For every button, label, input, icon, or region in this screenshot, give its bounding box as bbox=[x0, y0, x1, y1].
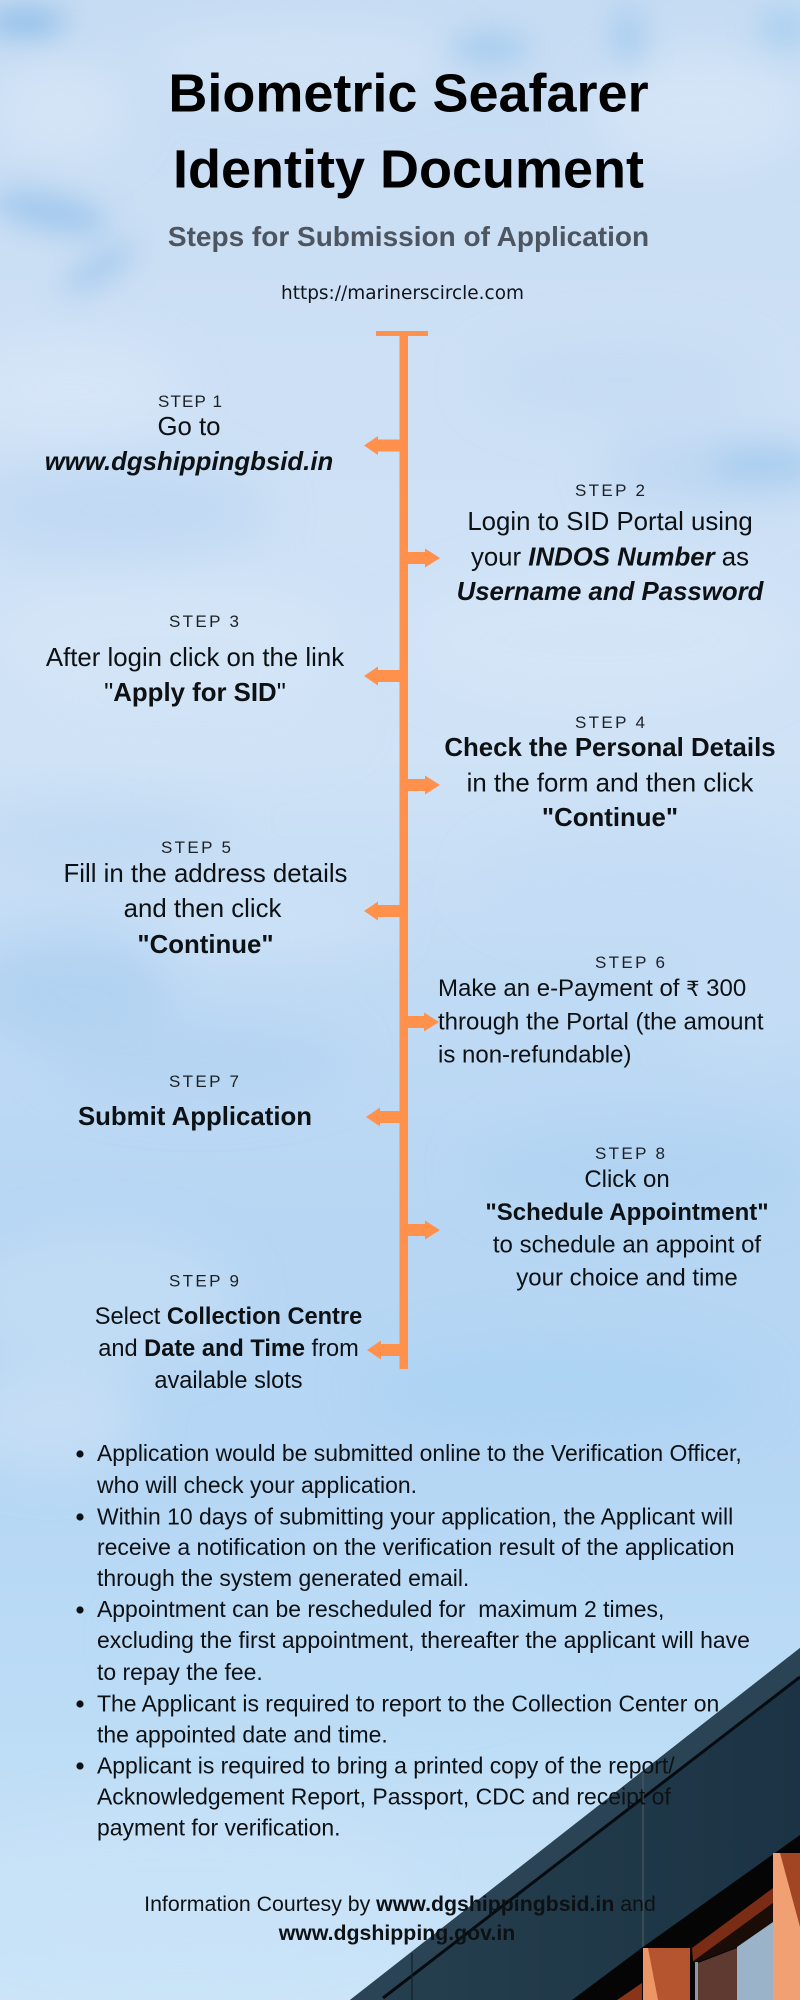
step 8: STEP 8 bbox=[595, 1144, 665, 1163]
step 5: "Continue" bbox=[137, 931, 274, 959]
step 4: STEP 4 bbox=[575, 713, 645, 732]
subtitle: Steps for Submission of Application bbox=[168, 221, 649, 252]
step 9: available slots bbox=[154, 1368, 303, 1394]
step 6: is non-refundable) bbox=[438, 1042, 631, 1068]
notes: bullet list: receive a notification on the verification result of the application bbox=[97, 1534, 735, 1560]
website url: https://marinerscircle.com bbox=[281, 282, 524, 304]
step 1: Go to bbox=[157, 413, 221, 441]
step 2: Username and Password bbox=[457, 578, 765, 606]
step 6: through the Portal (the amount bbox=[438, 1008, 764, 1036]
notes: bullet list: who will check your application. bbox=[96, 1472, 417, 1498]
step 7: STEP 7 bbox=[169, 1072, 239, 1091]
step 5: STEP 5 bbox=[161, 838, 231, 857]
step 4: in the form and then click bbox=[467, 770, 753, 798]
step 7 bbox=[78, 1072, 312, 1131]
notes: bullet list: Within 10 days of submitting your application, the Applicant will bbox=[97, 1504, 733, 1530]
step 8: "Schedule Appointment" bbox=[485, 1199, 769, 1226]
notes: bullet list: to repay the fee. bbox=[97, 1659, 263, 1685]
step 4: Check the Personal Details bbox=[444, 734, 776, 762]
step 4 bbox=[444, 713, 776, 832]
notes: bullet list: payment for verification. bbox=[97, 1814, 340, 1840]
building: roof corner bbox=[350, 1648, 800, 2000]
notes: bullet list bbox=[76, 1440, 750, 1840]
footer: information courtesy: Information Courtesy by www.dgshippingbsid.in and bbox=[144, 1892, 656, 1916]
notes: bullet list: Appointment can be rescheduled for maximum 2 times, bbox=[97, 1596, 664, 1622]
step 8: to schedule an appoint of bbox=[493, 1232, 761, 1258]
title bbox=[168, 64, 649, 200]
step 5 bbox=[64, 838, 347, 959]
step 1: STEP 1 bbox=[158, 392, 222, 411]
step 8 bbox=[485, 1144, 769, 1292]
step 2: Login to SID Portal using bbox=[467, 508, 753, 536]
notes: bullet list: the appointed date and time. bbox=[97, 1722, 388, 1748]
step 7: Submit Application bbox=[78, 1103, 312, 1131]
step 2: STEP 2 bbox=[575, 481, 645, 500]
step 6 bbox=[438, 953, 764, 1068]
step 3: After login click on the link bbox=[46, 644, 344, 672]
title: Identity Document bbox=[173, 140, 644, 200]
timeline: vertical line with arrows bbox=[364, 331, 440, 1369]
footer: information courtesy bbox=[144, 1892, 656, 1945]
step 1 bbox=[45, 392, 333, 476]
step 2 bbox=[457, 481, 765, 606]
step 1: www.dgshippingbsid.in bbox=[45, 448, 333, 476]
notes: bullet list: through the system generated email. bbox=[97, 1565, 469, 1591]
step 3 bbox=[46, 612, 344, 707]
step 4: "Continue" bbox=[542, 804, 678, 832]
step 9 bbox=[95, 1272, 362, 1394]
step 9: and Date and Time from bbox=[98, 1336, 359, 1362]
step 5: Fill in the address details bbox=[64, 860, 347, 888]
notes: bullet list: Application would be submitted online to the Verification Officer, bbox=[97, 1440, 742, 1466]
step 8: your choice and time bbox=[516, 1264, 738, 1292]
step 6: Make an e-Payment of ₹ 300 bbox=[438, 975, 746, 1002]
step 6: STEP 6 bbox=[595, 953, 665, 972]
title: Biometric Seafarer bbox=[168, 64, 649, 124]
step 9: STEP 9 bbox=[169, 1272, 239, 1290]
step 3: "Apply for SID" bbox=[104, 679, 286, 707]
footer: information courtesy: www.dgshipping.gov.in bbox=[278, 1921, 515, 1945]
notes: bullet list: The Applicant is required to report to the Collection Center on bbox=[97, 1690, 719, 1716]
step 5: and then click bbox=[124, 895, 281, 923]
step 3: STEP 3 bbox=[169, 612, 239, 631]
notes: bullet list: Acknowledgement Report, Passport, CDC and receipt of bbox=[97, 1784, 671, 1810]
step 9: Select Collection Centre bbox=[95, 1304, 362, 1330]
step 8: Click on bbox=[584, 1166, 670, 1193]
notes: bullet list: Applicant is required to bring a printed copy of the report/ bbox=[97, 1752, 675, 1778]
notes: bullet list: excluding the first appointment, thereafter the applicant will have bbox=[97, 1627, 750, 1653]
step 2: your INDOS Number as bbox=[471, 544, 749, 572]
